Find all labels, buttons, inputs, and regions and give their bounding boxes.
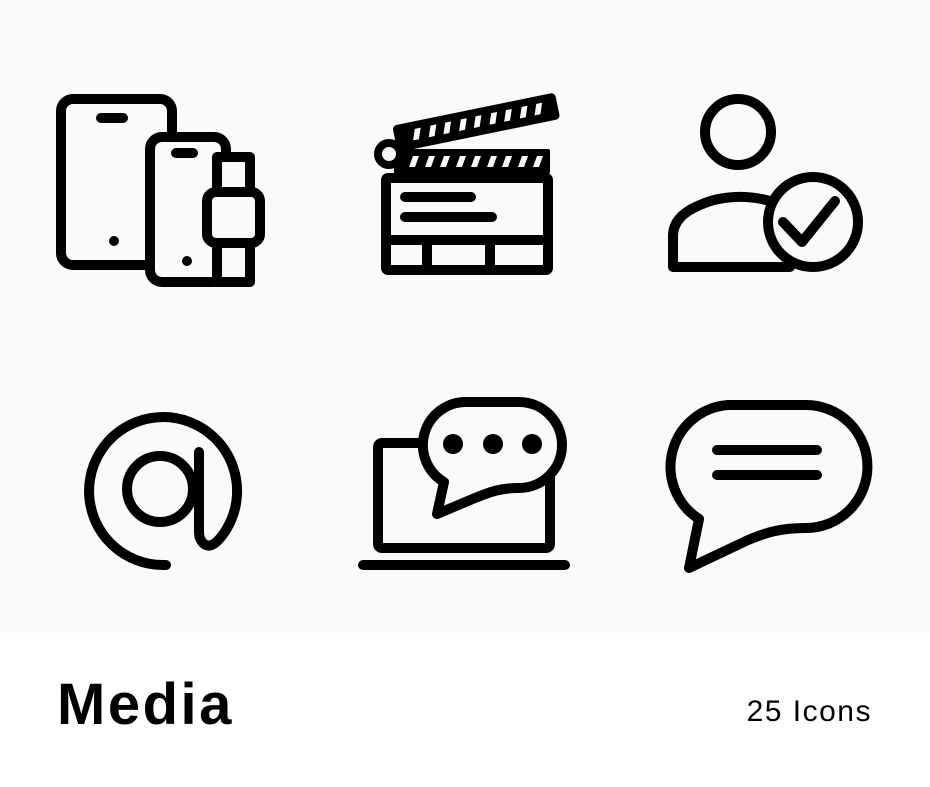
icon: speech bubble bbox=[671, 405, 867, 568]
title: Media bbox=[57, 672, 234, 737]
icon: clapperboard bbox=[378, 94, 558, 270]
icon count: 25 Icons bbox=[747, 695, 872, 728]
icon: devices bbox=[61, 99, 260, 282]
icon: at sign bbox=[89, 417, 237, 565]
icon: user check bbox=[673, 99, 858, 267]
icon: laptop chat bbox=[363, 402, 565, 565]
